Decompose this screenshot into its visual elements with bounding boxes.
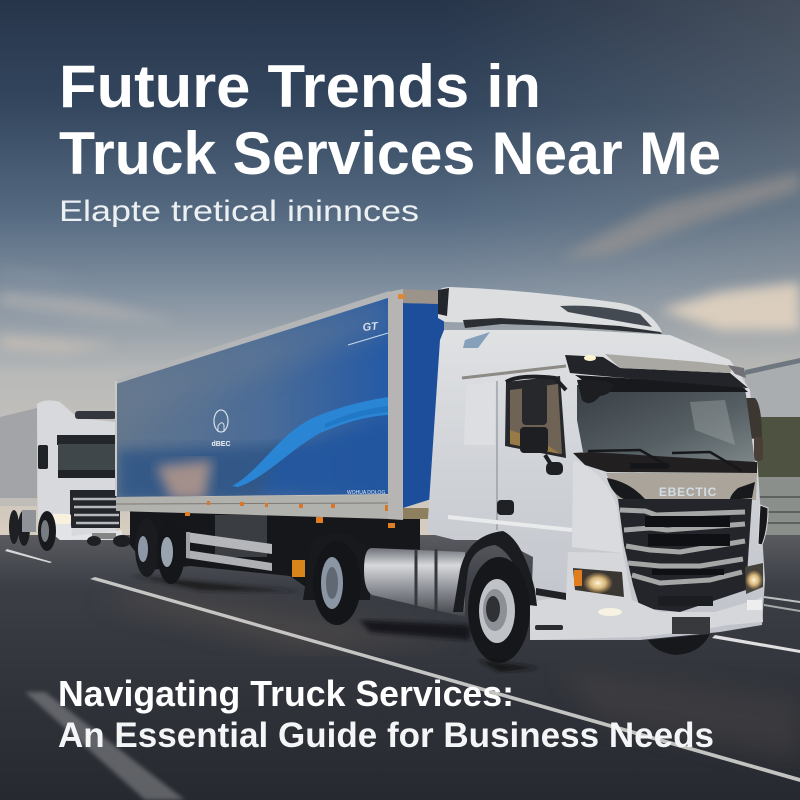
door window bbox=[505, 376, 566, 458]
trailer logo bbox=[211, 410, 231, 448]
truck: cab body bbox=[427, 287, 765, 640]
title: Future Trends in bbox=[59, 53, 541, 120]
mirrors bbox=[506, 377, 566, 475]
background: roadside building and barrier bbox=[745, 358, 800, 598]
swoosh graphic bbox=[232, 397, 388, 487]
right mirror bbox=[744, 398, 762, 440]
side panel bbox=[464, 382, 495, 445]
truck: trailer box: GT bbox=[362, 320, 380, 334]
background: sky bbox=[0, 0, 800, 540]
truck: rear truck in background bbox=[0, 400, 131, 551]
subtitle: Elapte tretical ininnces bbox=[59, 195, 419, 228]
bottom heading bbox=[58, 673, 714, 755]
cab corner fairing bbox=[572, 460, 623, 553]
bottom heading: Navigating Truck Services: bbox=[58, 673, 514, 714]
truck: tractor drive wheel and fender bbox=[303, 534, 370, 625]
truck: front grille: EBECTIC bbox=[659, 485, 717, 499]
cab corner blinker bbox=[758, 505, 768, 545]
bottom heading: An Essential Guide for Business Needs bbox=[58, 716, 714, 755]
trailer logo: dBEC bbox=[211, 441, 231, 448]
truck: undercarriage and trailer wheels bbox=[130, 508, 420, 592]
truck: trailer box: WOHUA DOLOG bbox=[347, 490, 385, 496]
road bbox=[0, 535, 800, 800]
roof fairing bbox=[438, 287, 662, 332]
truck: trailer box bbox=[115, 289, 444, 520]
truck: front grille bbox=[606, 473, 768, 612]
title bbox=[59, 53, 721, 187]
truck: bumper and headlights bbox=[530, 552, 763, 655]
truck: orange marker lights bbox=[185, 512, 395, 528]
cab seam lines bbox=[462, 366, 566, 378]
title: Truck Services Near Me bbox=[59, 120, 721, 187]
truck: windscreen and visor bbox=[565, 354, 757, 473]
truck: fuel tank bbox=[360, 548, 470, 640]
truck: front wheel and arch bbox=[453, 531, 540, 672]
